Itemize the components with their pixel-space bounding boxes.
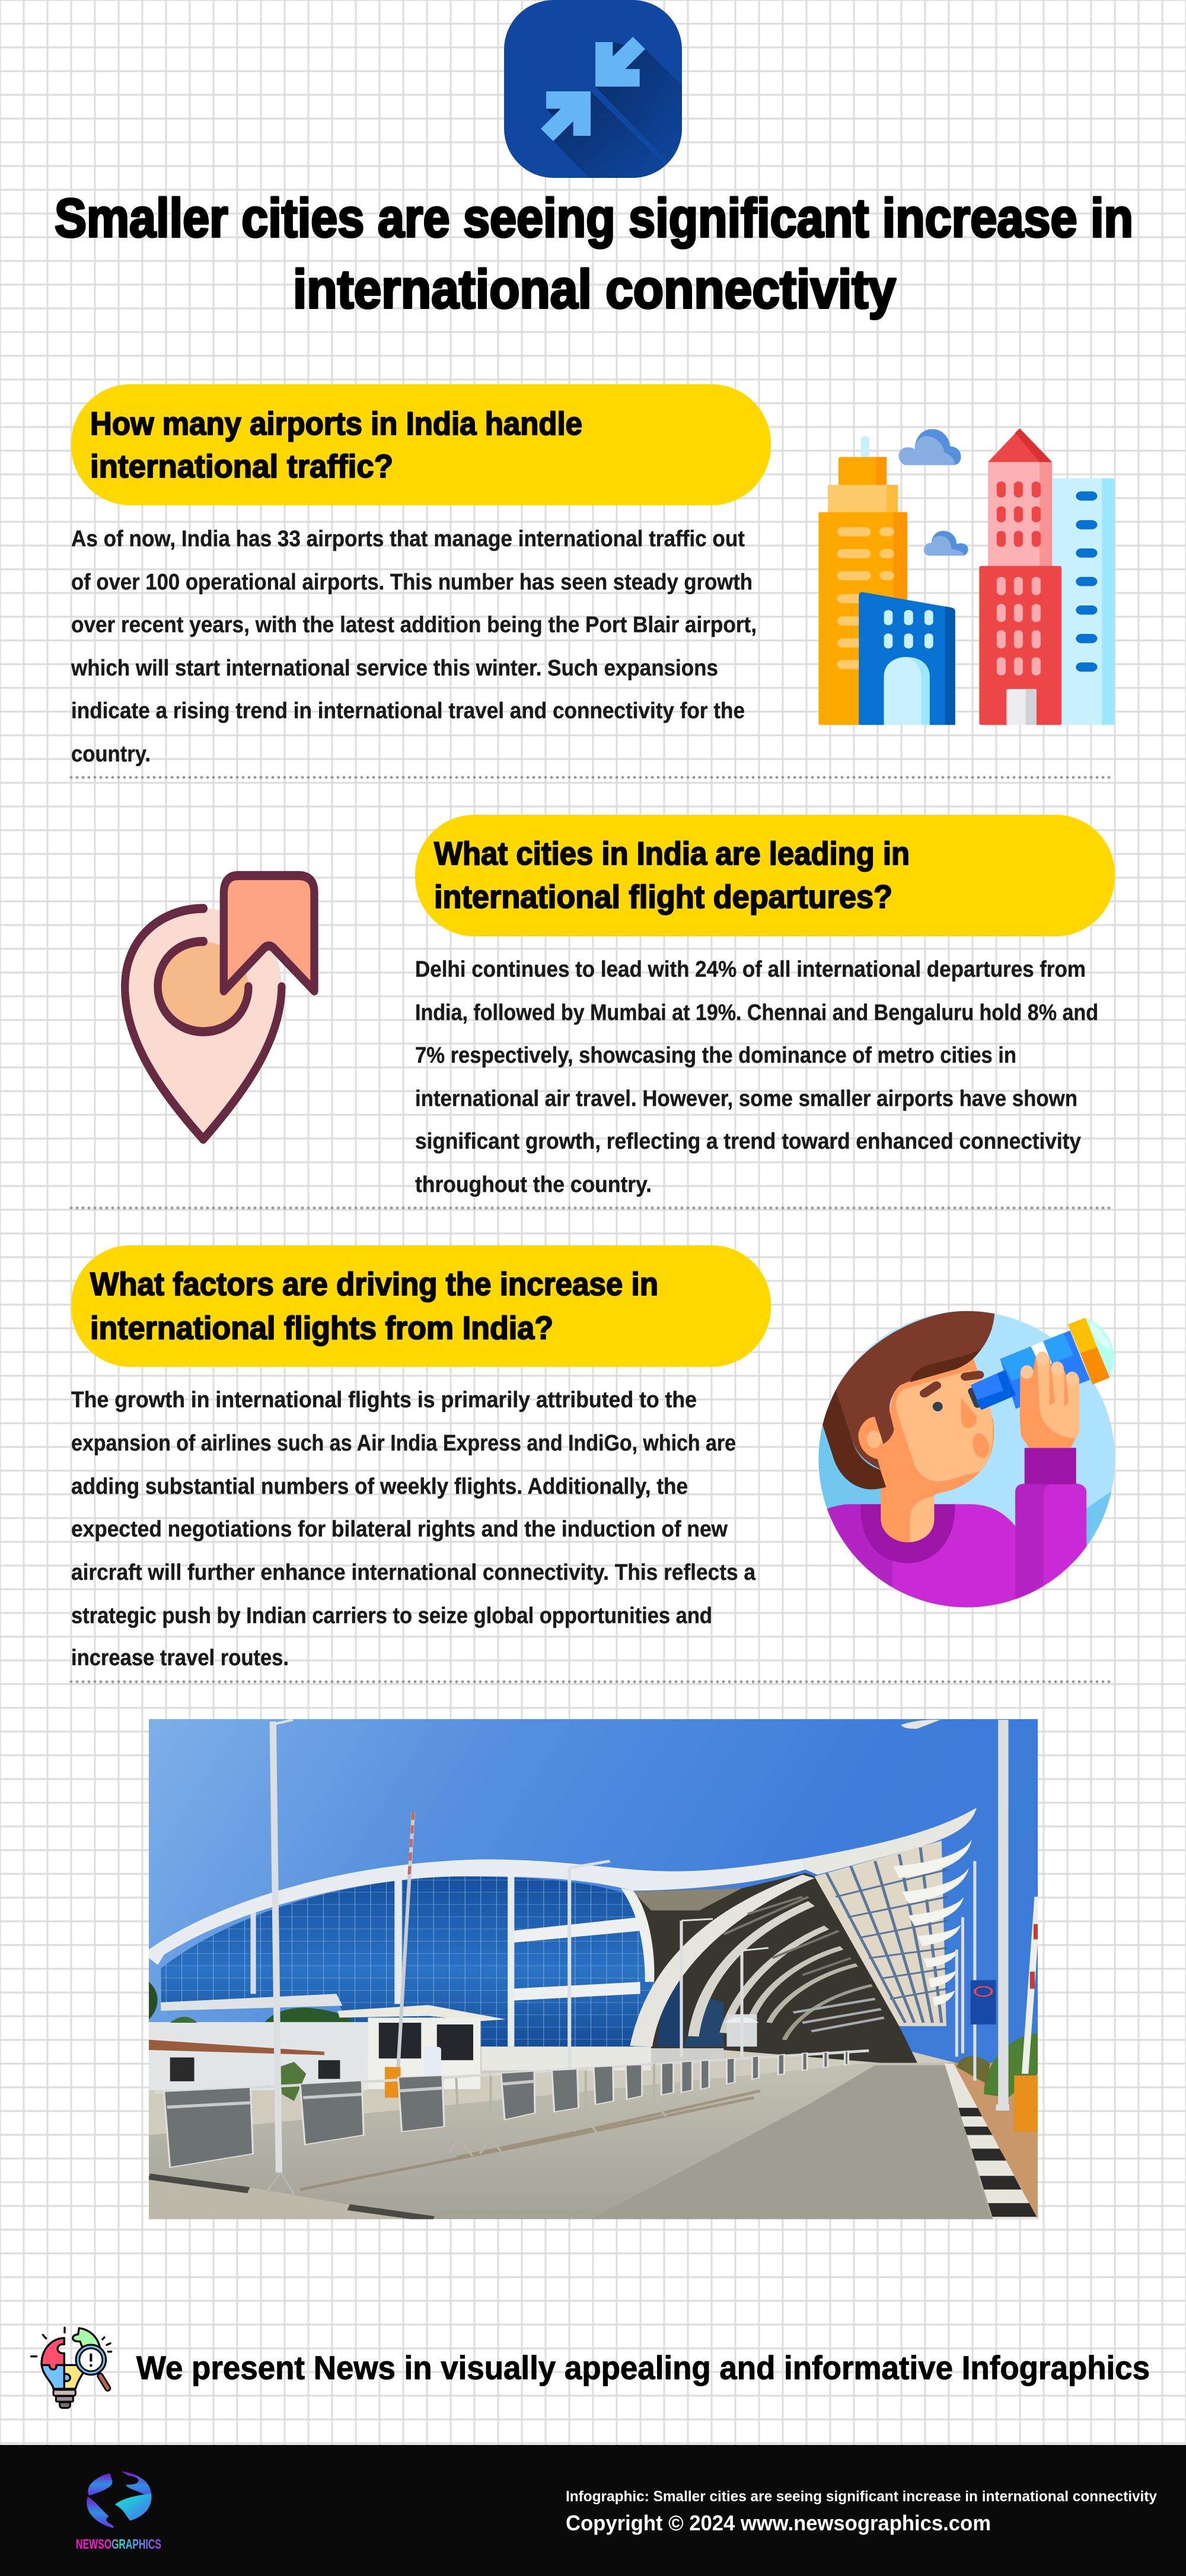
logo: newsographics globe: NEWSOGRAPHICS	[76, 2536, 161, 2552]
footer bar	[0, 2445, 1186, 2576]
body text 2	[415, 957, 1098, 1197]
footer credits	[566, 2488, 1157, 2535]
body text 2: significant growth, reflecting a trend toward enhanced connectivity	[415, 1129, 1081, 1154]
body text 3: The growth in international flights is primarily attributed to the	[71, 1388, 697, 1413]
icon: person with binoculars	[798, 1311, 1120, 1624]
photo: airport terminal	[149, 1719, 1038, 2219]
body text 2: 7% respectively, showcasing the dominance of metro cities in	[415, 1043, 1016, 1068]
body text 3: expansion of airlines such as Air India Express and IndiGo, which are	[71, 1431, 736, 1456]
body text 1: country.	[71, 742, 151, 767]
body text 3: expected negotiations for bilateral rights and the induction of new	[71, 1517, 728, 1542]
body text 3: increase travel routes.	[71, 1646, 289, 1670]
body text 2: international air travel. However, some smaller airports have shown	[415, 1086, 1077, 1111]
panel: driving factors	[71, 1245, 1120, 1670]
heading pill 2: international flight departures?	[434, 878, 892, 915]
body text 1: of over 100 operational airports. This number has seen steady growth	[71, 570, 753, 595]
heading pill 1: How many airports in India handle	[90, 405, 582, 442]
icon: puzzle lightbulb with magnifier	[31, 2328, 111, 2408]
body text 3: adding substantial numbers of weekly flights. Additionally, the	[71, 1474, 688, 1499]
body text 3: strategic push by Indian carriers to seize global opportunities and	[71, 1603, 712, 1628]
title	[55, 188, 1133, 320]
heading pill 3	[71, 1245, 771, 1367]
body text 1: which will start international service this winter. Such expansions	[71, 656, 718, 681]
body text 1	[71, 527, 757, 767]
heading pill 2	[415, 815, 1115, 936]
logo: newsographics globe	[76, 2471, 161, 2552]
heading pill 3: What factors are driving the increase in	[90, 1265, 658, 1302]
panel: leading cities	[125, 815, 1115, 1197]
footer credits: Infographic: Smaller cities are seeing significant increase in international connectivity	[566, 2488, 1157, 2505]
panel: how many airports	[71, 384, 1114, 767]
heading pill 3: international flights from India?	[90, 1309, 553, 1346]
title: international connectivity	[293, 259, 896, 320]
body text 1: over recent years, with the latest addition being the Port Blair airport,	[71, 613, 757, 637]
body text 2: throughout the country.	[415, 1172, 652, 1197]
body text 3: aircraft will further enhance international connectivity. This reflects a	[71, 1560, 756, 1585]
tagline: We present News in visually appealing and informative Infographics	[136, 2349, 1150, 2386]
body text 2: India, followed by Mumbai at 19%. Chennai and Bengaluru hold 8% and	[415, 1000, 1098, 1025]
icon: city buildings	[818, 429, 1114, 725]
body text 1: As of now, India has 33 airports that manage international traffic out	[71, 527, 745, 551]
heading pill 2: What cities in India are leading in	[434, 835, 910, 872]
footer credits: Copyright © 2024 www.newsographics.com	[566, 2511, 991, 2535]
heading pill 1: international traffic?	[90, 448, 393, 484]
heading pill 1	[71, 384, 771, 505]
body text 2: Delhi continues to lead with 24% of all international departures from	[415, 957, 1086, 982]
icon: map pin with flag	[125, 876, 314, 1140]
body text 3	[71, 1388, 756, 1670]
icon: compress arrows app icon	[504, 0, 682, 182]
body text 1: indicate a rising trend in international travel and connectivity for the	[71, 699, 745, 723]
